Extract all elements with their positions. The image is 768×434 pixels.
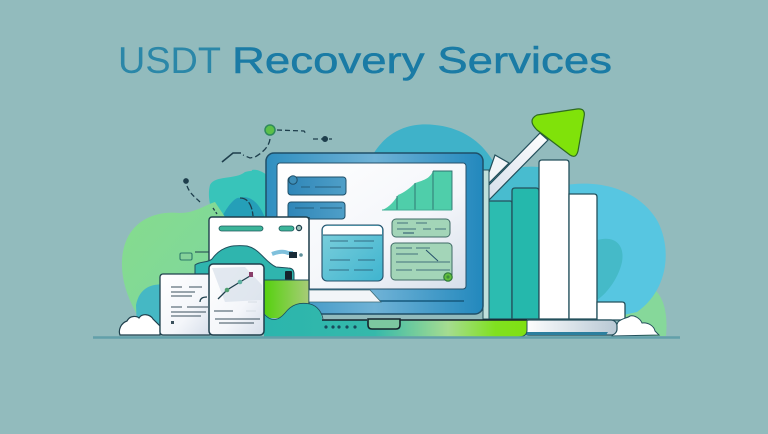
line chart xyxy=(218,272,253,299)
teal mound and green patch xyxy=(195,217,309,318)
right cloud xyxy=(612,316,659,336)
lower monitor shadow xyxy=(322,300,464,302)
left cloud xyxy=(119,315,160,335)
background blobs xyxy=(122,124,667,336)
screen area chart xyxy=(382,171,452,210)
dashed network lines xyxy=(184,125,332,216)
monitor back panel xyxy=(483,170,489,319)
screen large green card xyxy=(391,243,452,281)
title xyxy=(118,40,612,81)
screen button bottom xyxy=(288,202,345,219)
white tab under panel xyxy=(309,290,381,302)
screen button top xyxy=(288,176,346,195)
title: Recovery Services xyxy=(232,40,612,81)
stand notch xyxy=(368,319,400,329)
title: USDT xyxy=(118,40,221,81)
screen cyan card xyxy=(322,225,383,281)
monitor frame xyxy=(266,153,483,314)
bar chart xyxy=(488,160,625,320)
arrow xyxy=(488,109,584,201)
ground line xyxy=(93,336,680,339)
small tag on green blob xyxy=(180,252,209,260)
right laptop base xyxy=(523,320,617,335)
screen small green card xyxy=(392,219,450,237)
monitor screen xyxy=(277,163,466,289)
left dashboard panel xyxy=(209,217,309,300)
document card back xyxy=(160,274,212,335)
green teal base bar xyxy=(264,303,527,337)
monitor xyxy=(266,153,489,319)
indicator dots xyxy=(324,325,357,329)
document card front with line chart xyxy=(209,264,264,335)
